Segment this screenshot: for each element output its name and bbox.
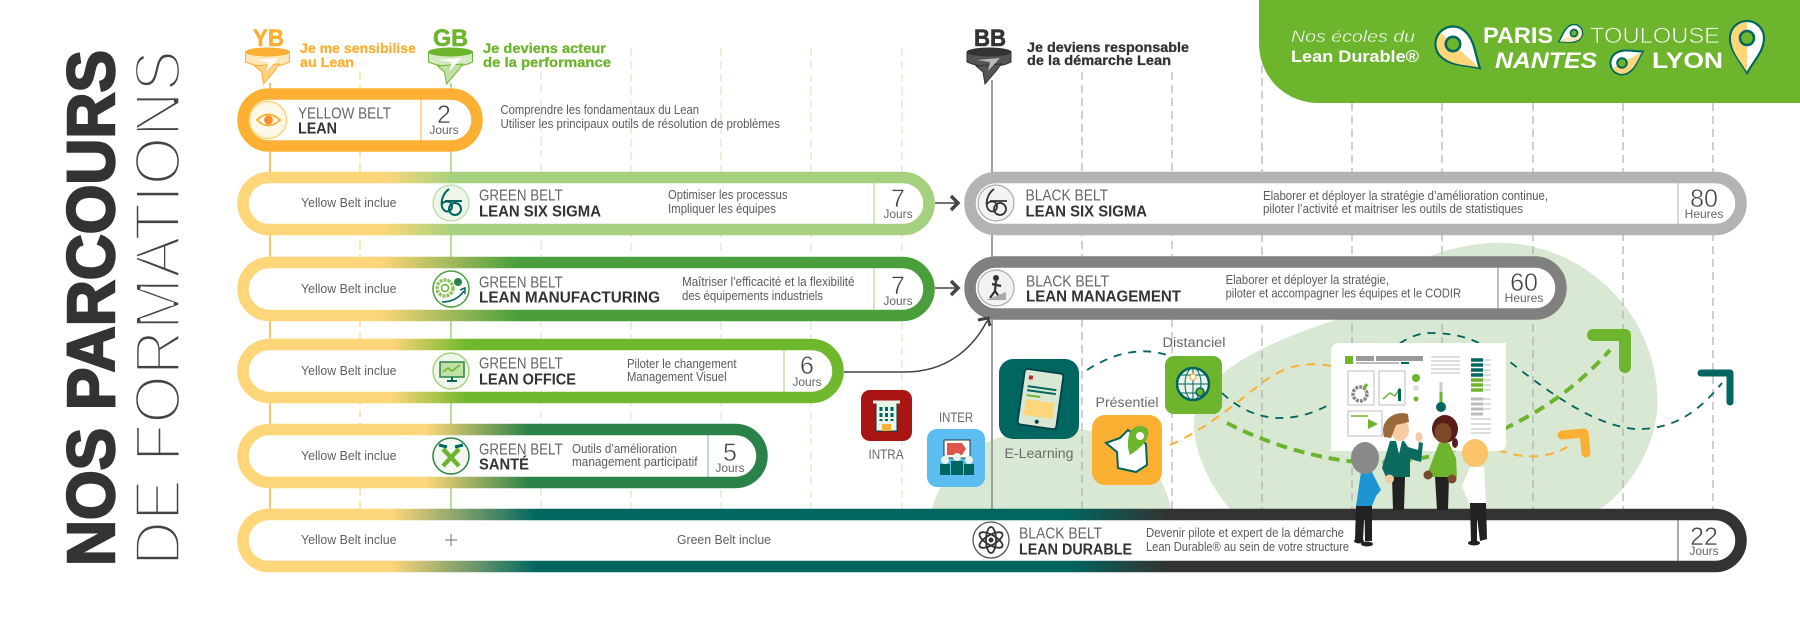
panel: yellow belt lean <box>243 94 477 146</box>
icon: inter <box>927 429 985 487</box>
panel: yellow belt lean: 2 <box>437 101 451 129</box>
panel: green belt lean six sigma: GREEN BELT <box>479 188 563 204</box>
panel: green belt lean six sigma <box>243 178 929 230</box>
panel: black belt lean management: Elaborer et déployer la stratégie, <box>1226 273 1389 287</box>
panel: green belt sante: Outils d’amélioration <box>572 442 677 456</box>
banner: schools: LYON <box>1652 48 1723 73</box>
text: yellow belt description: Comprendre les fondamentaux du Lean <box>500 103 699 117</box>
panel: black belt lean durable: BLACK BELT <box>1019 526 1102 542</box>
person: green jacket <box>1424 415 1458 510</box>
panel: black belt lean management: Heures <box>1505 291 1543 305</box>
icon: six sigma <box>433 185 469 221</box>
panel: green belt lean office: Jours <box>792 375 822 389</box>
label: intra: INTRA <box>868 447 904 462</box>
header: black belt: BB <box>974 25 1006 52</box>
panel: black belt lean durable: Lean Durable® au sein de votre structure <box>1146 540 1349 554</box>
panel: green belt lean office: Management Visuel <box>627 370 727 384</box>
panel: yellow belt lean: Jours <box>429 123 459 137</box>
text: yellow belt description: Utiliser les principaux outils de résolution de problèmes <box>500 117 780 131</box>
background blob: left <box>932 429 1171 509</box>
person: white shirt <box>1462 439 1488 546</box>
panel: black belt lean six sigma: Elaborer et déployer la stratégie d’amélioration continue, <box>1263 189 1548 203</box>
panel: green belt lean office: 6 <box>800 352 814 380</box>
title <box>54 50 194 566</box>
board: dashboard <box>1331 343 1506 451</box>
title: NOS PARCOURS <box>54 50 129 566</box>
header: black belt: Je deviens responsable <box>1027 39 1189 55</box>
header: green belt: GB <box>433 25 468 52</box>
panel: green belt lean office: LEAN OFFICE <box>479 372 576 388</box>
panel: green belt sante: Yellow Belt inclue <box>301 449 397 463</box>
panel: green belt sante <box>243 430 762 482</box>
arrow: manufacturing green to black <box>935 281 958 295</box>
header: yellow belt <box>245 25 416 84</box>
panel: black belt lean management: LEAN MANAGEMENT <box>1026 288 1182 306</box>
icon: climber <box>978 270 1014 306</box>
arrow head: green <box>1593 335 1625 367</box>
icon: pin 1 <box>1428 19 1492 81</box>
label: presentiel: Présentiel <box>1096 395 1158 410</box>
header: green belt <box>428 25 611 84</box>
icon: screen <box>433 353 469 389</box>
panel: green belt lean manufacturing: Yellow Belt inclue <box>301 282 397 296</box>
panel: black belt lean six sigma: LEAN SIX SIGMA <box>1026 204 1147 220</box>
icon: crossed tools <box>433 438 469 474</box>
panel: green belt sante: management participatif <box>572 455 698 469</box>
panel: black belt lean durable: LEAN DURABLE <box>1019 542 1132 558</box>
panel: green belt lean office: GREEN BELT <box>479 356 563 372</box>
panel: green belt lean office: Piloter le changement <box>627 357 737 371</box>
panel: black belt lean management: piloter et accompagner les équipes et le CODIR <box>1226 286 1461 300</box>
panel: green belt sante: GREEN BELT <box>479 442 563 458</box>
panel: black belt lean durable: Green Belt inclue <box>677 533 771 547</box>
panel: yellow belt lean: LEAN <box>298 120 337 138</box>
banner: schools: TOULOUSE <box>1590 23 1720 48</box>
banner: schools: NANTES <box>1495 48 1597 73</box>
panel: green belt lean manufacturing: des équipements industriels <box>682 289 823 303</box>
banner: schools: PARIS <box>1483 23 1553 48</box>
panel: black belt lean six sigma: Heures <box>1685 207 1723 221</box>
header: yellow belt: YB <box>253 25 284 52</box>
label: distanciel: Distanciel <box>1162 335 1226 350</box>
banner: schools: Lean Durable® <box>1291 47 1419 66</box>
header: yellow belt: au Lean <box>300 54 354 70</box>
dashed path: orange <box>1170 364 1567 456</box>
panel: green belt lean six sigma: Optimiser les processus <box>668 188 788 202</box>
panel: black belt lean management: 60 <box>1510 269 1538 297</box>
banner: schools: Nos écoles du <box>1291 27 1416 46</box>
header: green belt: Je deviens acteur <box>483 40 607 56</box>
header: black belt <box>966 25 1189 84</box>
panel: black belt lean durable: Devenir pilote et expert de la démarche <box>1146 526 1344 540</box>
label: e-learning: E-Learning <box>1004 446 1074 461</box>
dashed path: teal <box>1087 333 1722 429</box>
panel: black belt lean six sigma <box>970 178 1741 230</box>
panel: green belt lean manufacturing: GREEN BELT <box>479 274 563 292</box>
panel: black belt lean six sigma: piloter l’activité et maitriser les outils de statistiques <box>1263 202 1523 216</box>
text: yellow belt description <box>500 103 780 131</box>
panel: green belt lean manufacturing: Jours <box>883 294 913 308</box>
panel: black belt lean durable: Yellow Belt inclue <box>301 533 397 547</box>
panel: black belt lean management <box>970 262 1561 314</box>
label: inter: INTER <box>939 410 973 425</box>
arrow head: orange <box>1562 433 1586 453</box>
panel: black belt lean durable: Jours <box>1689 544 1719 558</box>
arrow head: teal <box>1701 373 1730 402</box>
panel: green belt lean six sigma: LEAN SIX SIGMA <box>479 204 601 220</box>
icon: plus <box>445 534 457 546</box>
panel: yellow belt lean: YELLOW BELT <box>298 106 391 122</box>
person: blue jacket <box>1351 442 1381 546</box>
icon: six sigma grey <box>978 185 1014 221</box>
panel: green belt sante: Jours <box>715 461 745 475</box>
panel: green belt lean six sigma: Impliquer les équipes <box>668 202 776 216</box>
arrow: six sigma green to black <box>935 196 958 210</box>
icon: gears <box>433 271 469 307</box>
panel: black belt lean six sigma: BLACK BELT <box>1026 188 1108 204</box>
background blob: right <box>1194 243 1658 509</box>
header: black belt: de la démarche Lean <box>1027 52 1171 68</box>
icon: pin 3 <box>1606 41 1648 79</box>
header: green belt: de la performance <box>483 54 611 70</box>
panel: green belt lean office <box>243 344 838 398</box>
arrow: office to management <box>844 318 990 372</box>
panel: green belt lean six sigma: 7 <box>891 185 905 213</box>
header: yellow belt: Je me sensibilise <box>300 40 416 56</box>
panel: black belt lean durable: 22 <box>1690 523 1718 551</box>
panel: black belt lean six sigma: 80 <box>1690 185 1718 213</box>
icon: pin 4 <box>1730 21 1764 73</box>
dashed path: green <box>1227 350 1610 463</box>
panel: black belt lean management: BLACK BELT <box>1026 274 1109 290</box>
panel: black belt lean durable <box>243 514 1741 566</box>
person: teal jacket <box>1382 413 1423 510</box>
icon: e-learning <box>999 359 1079 439</box>
banner: schools <box>1259 0 1800 103</box>
icon: intra <box>861 390 912 441</box>
panel: green belt lean six sigma: Jours <box>883 207 913 221</box>
icon: atom <box>973 522 1009 558</box>
vertical line: yellow belt <box>269 83 271 510</box>
vertical line: green belt <box>450 83 452 510</box>
panel: green belt lean manufacturing: LEAN MANUFACTURING <box>479 290 660 306</box>
icon: presentiel <box>1092 415 1162 485</box>
icon: distanciel <box>1165 356 1222 414</box>
panel: green belt lean manufacturing: Maîtriser l’efficacité et la flexibilité <box>682 275 855 289</box>
panel: green belt lean manufacturing <box>243 262 929 316</box>
icon: pin 2 <box>1555 21 1586 49</box>
panel: green belt sante: SANTÉ <box>479 456 529 474</box>
panel: green belt lean six sigma: Yellow Belt inclue <box>301 196 397 210</box>
title: DE FORMATIONS <box>121 50 194 566</box>
vertical line: black belt <box>991 80 993 510</box>
panel: green belt sante: 5 <box>723 439 737 467</box>
icon: eye <box>250 102 286 138</box>
panel: green belt lean office: Yellow Belt inclue <box>301 364 397 378</box>
panel: green belt lean manufacturing: 7 <box>891 272 905 300</box>
